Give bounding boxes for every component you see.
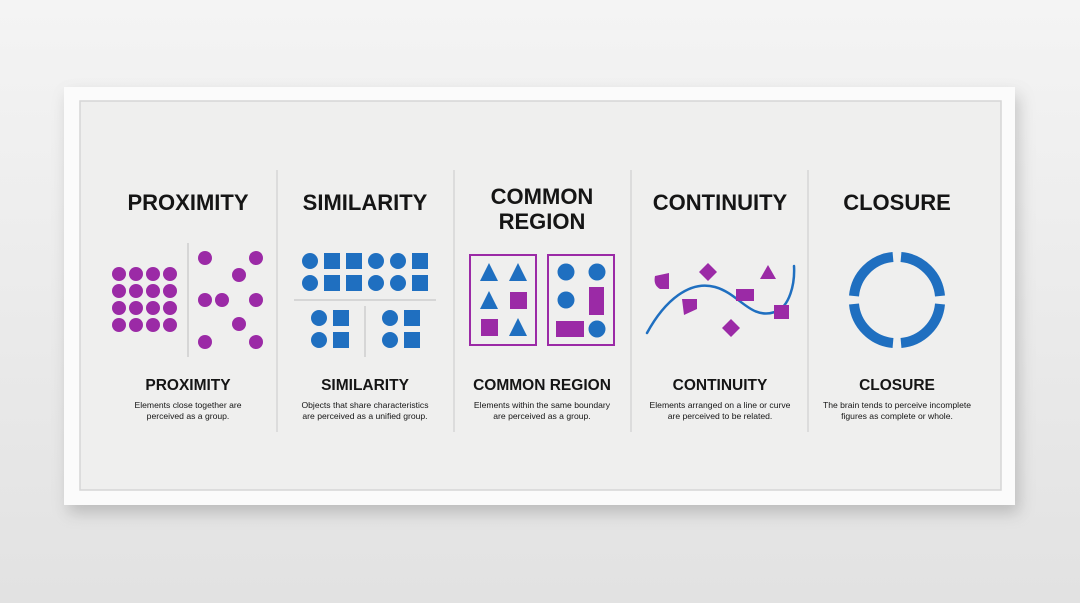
- heading: proximity: PROXIMITY: [127, 190, 249, 215]
- heading: closure: CLOSURE: [843, 190, 951, 215]
- panel: similarity: [294, 190, 436, 421]
- subheading: CLOSURE: [859, 377, 935, 394]
- subheading: SIMILARITY: [321, 377, 410, 394]
- panel: proximity: [112, 190, 263, 421]
- panel: common region: are perceived as a group.: [493, 411, 591, 421]
- panel: closure: figures as complete or whole.: [841, 411, 953, 421]
- panel: proximity: perceived as a group.: [147, 411, 229, 421]
- panel: continuity: are perceived to be related.: [668, 411, 772, 421]
- panel: continuity: [647, 190, 794, 421]
- subheading: CONTINUITY: [673, 377, 768, 394]
- panel: closure: [823, 190, 971, 421]
- heading: continuity: CONTINUITY: [653, 190, 788, 215]
- icon: similarity shapes: [294, 253, 436, 357]
- icon: closure ring: [854, 257, 940, 343]
- description: The brain tends to perceive incomplete: [823, 400, 971, 410]
- description: Objects that share characteristics: [301, 400, 429, 410]
- heading: similarity: SIMILARITY: [303, 190, 428, 215]
- description: Elements within the same boundary: [474, 400, 611, 410]
- subheading: PROXIMITY: [145, 377, 231, 394]
- heading: common region: COMMON: [491, 184, 593, 209]
- icon: common region boxes: [470, 255, 614, 345]
- description: Elements close together are: [134, 400, 242, 410]
- panel: common region: REGION: [499, 209, 585, 234]
- icon: continuity curve: [647, 263, 794, 337]
- panel: similarity: are perceived as a unified group.: [302, 411, 428, 421]
- icon: proximity dots: [112, 243, 263, 357]
- subheading: COMMON REGION: [473, 377, 611, 394]
- panel: common region: [470, 184, 614, 421]
- description: Elements arranged on a line or curve: [650, 400, 791, 410]
- frame: [64, 87, 1015, 505]
